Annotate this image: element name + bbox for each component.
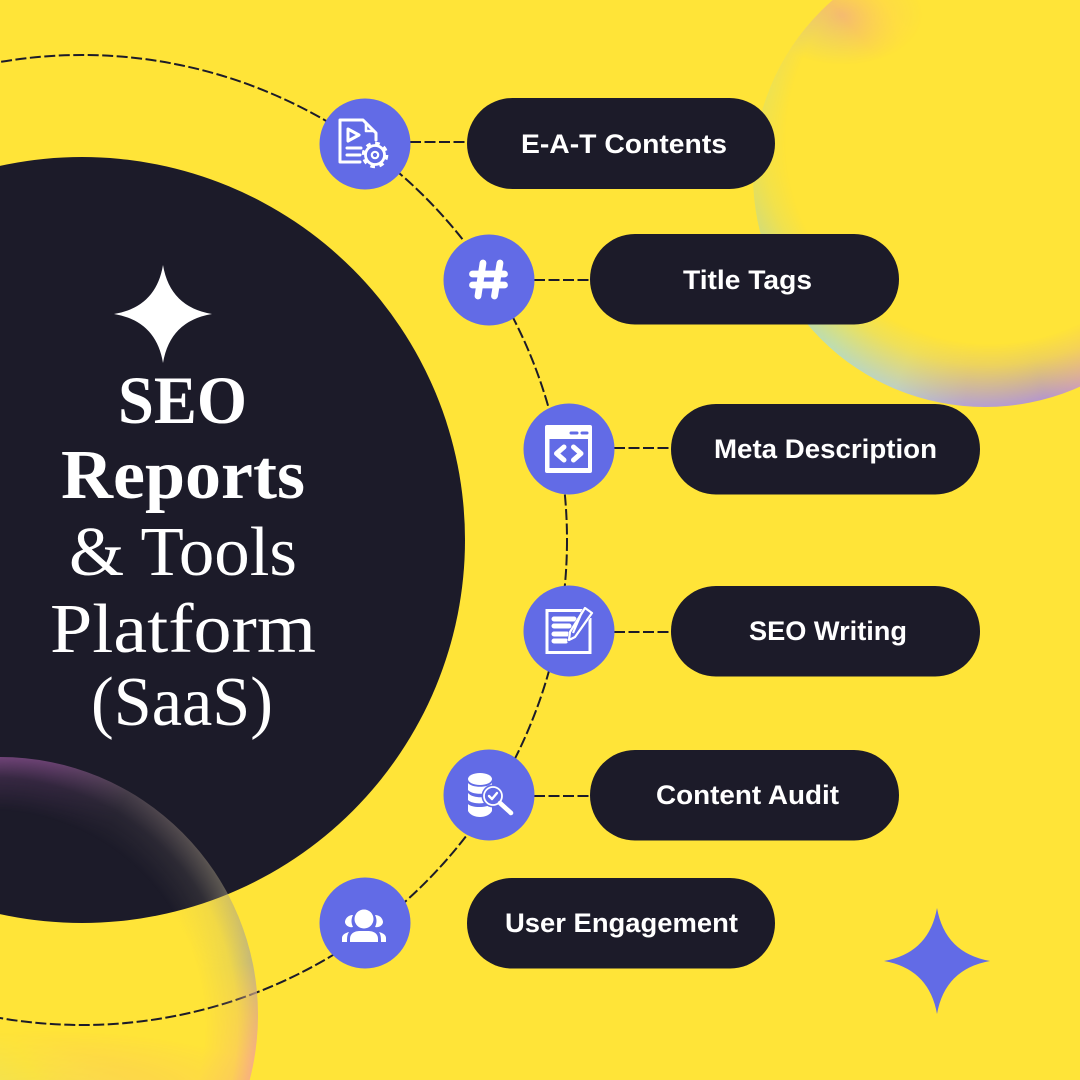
title: Platform [50,591,316,668]
icon: database with magnifier [444,750,534,840]
pill: Title Tags: Title Tags [683,265,812,295]
icon: white sparkle [114,265,212,363]
icon: notepad with pencil [524,586,614,676]
title: & Tools [69,514,297,591]
pill: E-A-T Contents [467,98,775,189]
dashed connectors [410,142,671,796]
icon: code window [524,404,614,494]
pill: Meta Description: Meta Description [714,434,937,464]
pill: Content Audit: Content Audit [656,780,839,810]
pill: Title Tags [590,234,899,324]
title: SEO [118,362,247,438]
pill: Content Audit [590,750,899,840]
pill: Meta Description [671,404,980,494]
decorative bubble: top right [753,0,1080,407]
icon: users [320,878,410,968]
pill: User Engagement: User Engagement [505,908,738,938]
dashed arc [0,55,567,1025]
icon: hashtag [444,234,534,326]
pill: SEO Writing [671,586,980,676]
title: Reports [61,437,305,514]
pill: SEO Writing: SEO Writing [749,616,907,646]
icon: document with gear [320,98,410,190]
title [50,362,316,741]
decorative bubble: bottom left [0,755,258,1080]
dark title circle [0,157,465,923]
pill: E-A-T Contents: E-A-T Contents [521,129,727,159]
title: (SaaS) [91,664,273,741]
pill: User Engagement [467,878,775,968]
icon: blue sparkle [884,908,990,1014]
